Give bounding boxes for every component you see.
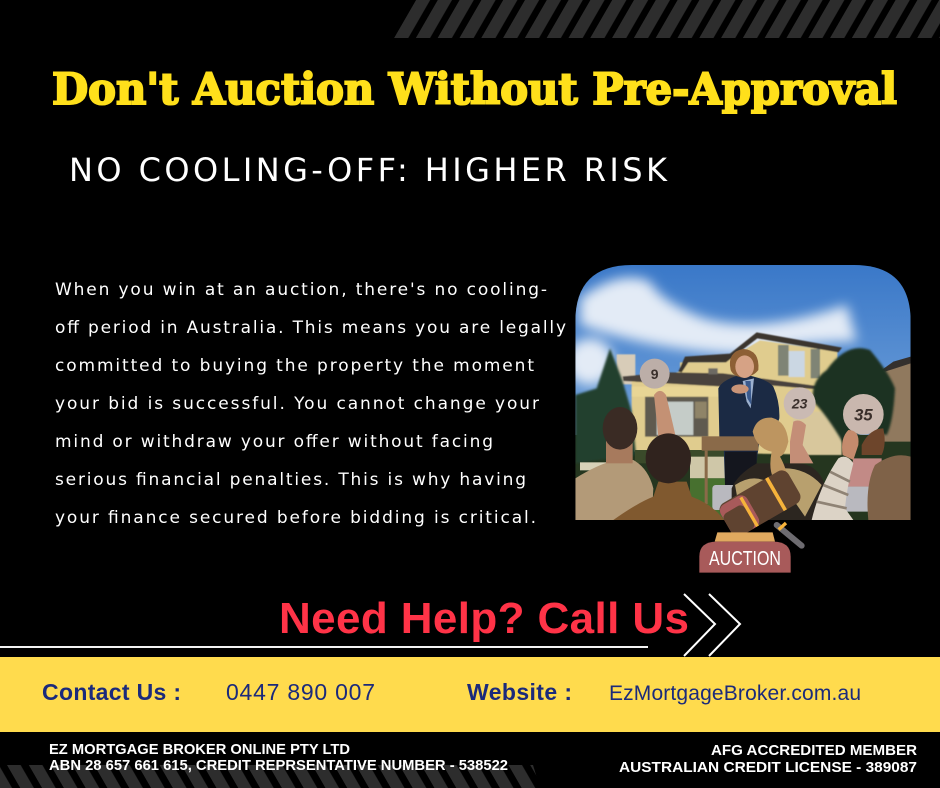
accreditation details: AFG ACCREDITED MEMBER: [711, 742, 917, 759]
bottom decorative stripes: [0, 765, 540, 788]
sound block base: [715, 532, 775, 542]
sky: [575, 265, 910, 435]
garden and stone wall: [580, 450, 728, 520]
website url: EzMortgageBroker.com.au: [609, 682, 861, 705]
accreditation details: AUSTRALIAN CREDIT LICENSE - 389087: [619, 759, 917, 776]
company details: [49, 741, 508, 774]
bid paddle 9: 9: [651, 366, 659, 382]
gavel handle band: [779, 523, 786, 530]
auction photo illustration: [567, 265, 911, 573]
curly hair bidder: [867, 455, 911, 520]
body paragraph: your finance secured before bidding is critical.: [55, 508, 536, 528]
body paragraph: [55, 280, 566, 528]
title: Don't Auction Without Pre-Approval: [52, 65, 897, 115]
background foliage: [575, 435, 911, 520]
neighbouring house: [883, 361, 911, 442]
body paragraph: committed to buying the property the moment: [55, 356, 534, 376]
body paragraph: off period in Australia. This means you are legally: [55, 318, 566, 338]
bidder in striped top: [812, 430, 859, 520]
podium: [702, 436, 758, 504]
auction label: AUCTION: [709, 548, 781, 570]
accreditation details: [619, 742, 917, 776]
house: [617, 332, 842, 455]
bald bidder: [613, 433, 724, 520]
company details: EZ MORTGAGE BROKER ONLINE PTY LTD: [49, 741, 350, 758]
company details: ABN 28 657 661 615, CREDIT REPRSENTATIVE NUMBER - 538522: [49, 757, 508, 774]
gavel head: [717, 467, 803, 539]
woman in pink: [848, 428, 885, 487]
phone number: 0447 890 007: [226, 679, 375, 705]
bidder left in beige: [575, 391, 675, 520]
chairs: [712, 485, 872, 512]
bid paddle 35: [843, 394, 884, 435]
bid paddle 9: [640, 359, 670, 389]
blonde bidder in patterned top: [732, 418, 825, 520]
call to action: Need Help? Call Us: [279, 594, 689, 643]
subtitle: NO COOLING-OFF: HIGHER RISK: [69, 151, 668, 189]
website label: Website :: [467, 679, 572, 705]
auctioneer: [718, 349, 779, 485]
gavel icon: [699, 467, 803, 573]
trees: [575, 348, 895, 463]
auction label block: [699, 542, 791, 573]
contact bar: [0, 657, 940, 732]
body paragraph: mind or withdraw your offer without facing: [55, 432, 493, 452]
contact us label: Contact Us :: [42, 679, 181, 705]
bid paddle 23: 23: [791, 395, 808, 411]
top decorative stripes: [394, 0, 940, 38]
bid paddle 23: [784, 387, 816, 419]
clouds: [567, 278, 857, 385]
body paragraph: serious financial penalties. This is why having: [55, 470, 526, 490]
gavel handle: [777, 525, 802, 546]
roof of neighbouring house: [882, 357, 911, 372]
chevron arrows: [684, 594, 740, 656]
body paragraph: your bid is successful. You cannot change your: [55, 394, 539, 414]
divider line: [0, 646, 648, 648]
body paragraph: When you win at an auction, there's no cooling-: [55, 280, 547, 300]
bid paddle 35: 35: [854, 405, 873, 424]
